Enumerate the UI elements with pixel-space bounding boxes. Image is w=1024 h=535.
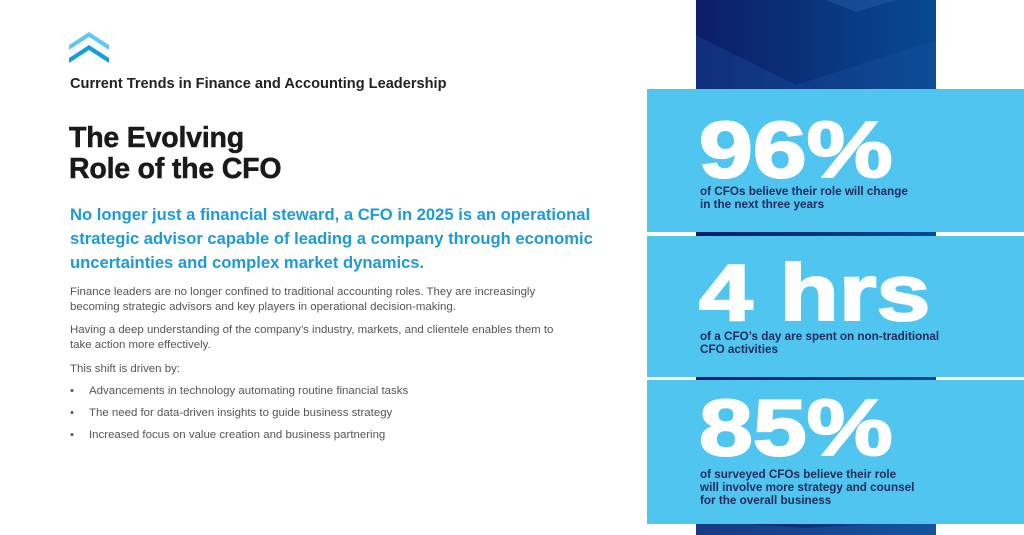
bullet list: Advancements in technology automating routine financial tasks (89, 385, 408, 397)
body text (70, 286, 553, 375)
stat panel: 4 hrs: of a CFO’s day are spent on non-traditional (700, 330, 939, 343)
stat panel: 85%: of surveyed CFOs believe their role (700, 468, 896, 481)
icon: chevrons logo (69, 32, 109, 63)
title: Role of the CFO (69, 153, 281, 185)
header line: Current Trends in Finance and Accounting Leadership (70, 76, 447, 92)
bullet list: • (70, 385, 74, 397)
stat panel: 4 hrs: CFO activities (700, 343, 778, 356)
bullet list (70, 385, 408, 441)
body text: becoming strategic advisors and key players in operational decision-making. (70, 301, 456, 313)
subtitle (70, 205, 593, 272)
stat panel: 4 hrs: 4 hrs (699, 248, 930, 337)
stat panel: 4 hrs (647, 236, 1024, 377)
title (69, 122, 281, 185)
stat panel: 96%: 96% (699, 105, 893, 194)
stat panel: 96%: in the next three years (700, 198, 824, 211)
bullet list: Increased focus on value creation and business partnering (89, 429, 385, 441)
bullet list: • (70, 407, 74, 419)
subtitle: uncertainties and complex market dynamics. (70, 253, 424, 272)
title: The Evolving (69, 122, 244, 154)
stat panel: 85% (647, 380, 1024, 524)
bullet list: The need for data-driven insights to guide business strategy (89, 407, 392, 419)
stat panel: 96%: of CFOs believe their role will change (700, 185, 908, 198)
dark blue background strip (696, 0, 936, 535)
subtitle: strategic advisor capable of leading a company through economic (70, 229, 593, 248)
stat panel: 85%: will involve more strategy and counsel (700, 481, 914, 494)
subtitle: No longer just a financial steward, a CFO in 2025 is an operational (70, 205, 590, 224)
body text: Having a deep understanding of the company’s industry, markets, and clientele enables them to (70, 324, 553, 336)
stat panel: 85%: 85% (699, 383, 893, 472)
stat panel: 85%: for the overall business (700, 494, 831, 507)
body text: take action more effectively. (70, 339, 211, 351)
body text: Finance leaders are no longer confined to traditional accounting roles. They are increasingly (70, 286, 535, 298)
body text: This shift is driven by: (70, 363, 180, 375)
bullet list: • (70, 429, 74, 441)
stat panel: 96% (647, 89, 1024, 232)
